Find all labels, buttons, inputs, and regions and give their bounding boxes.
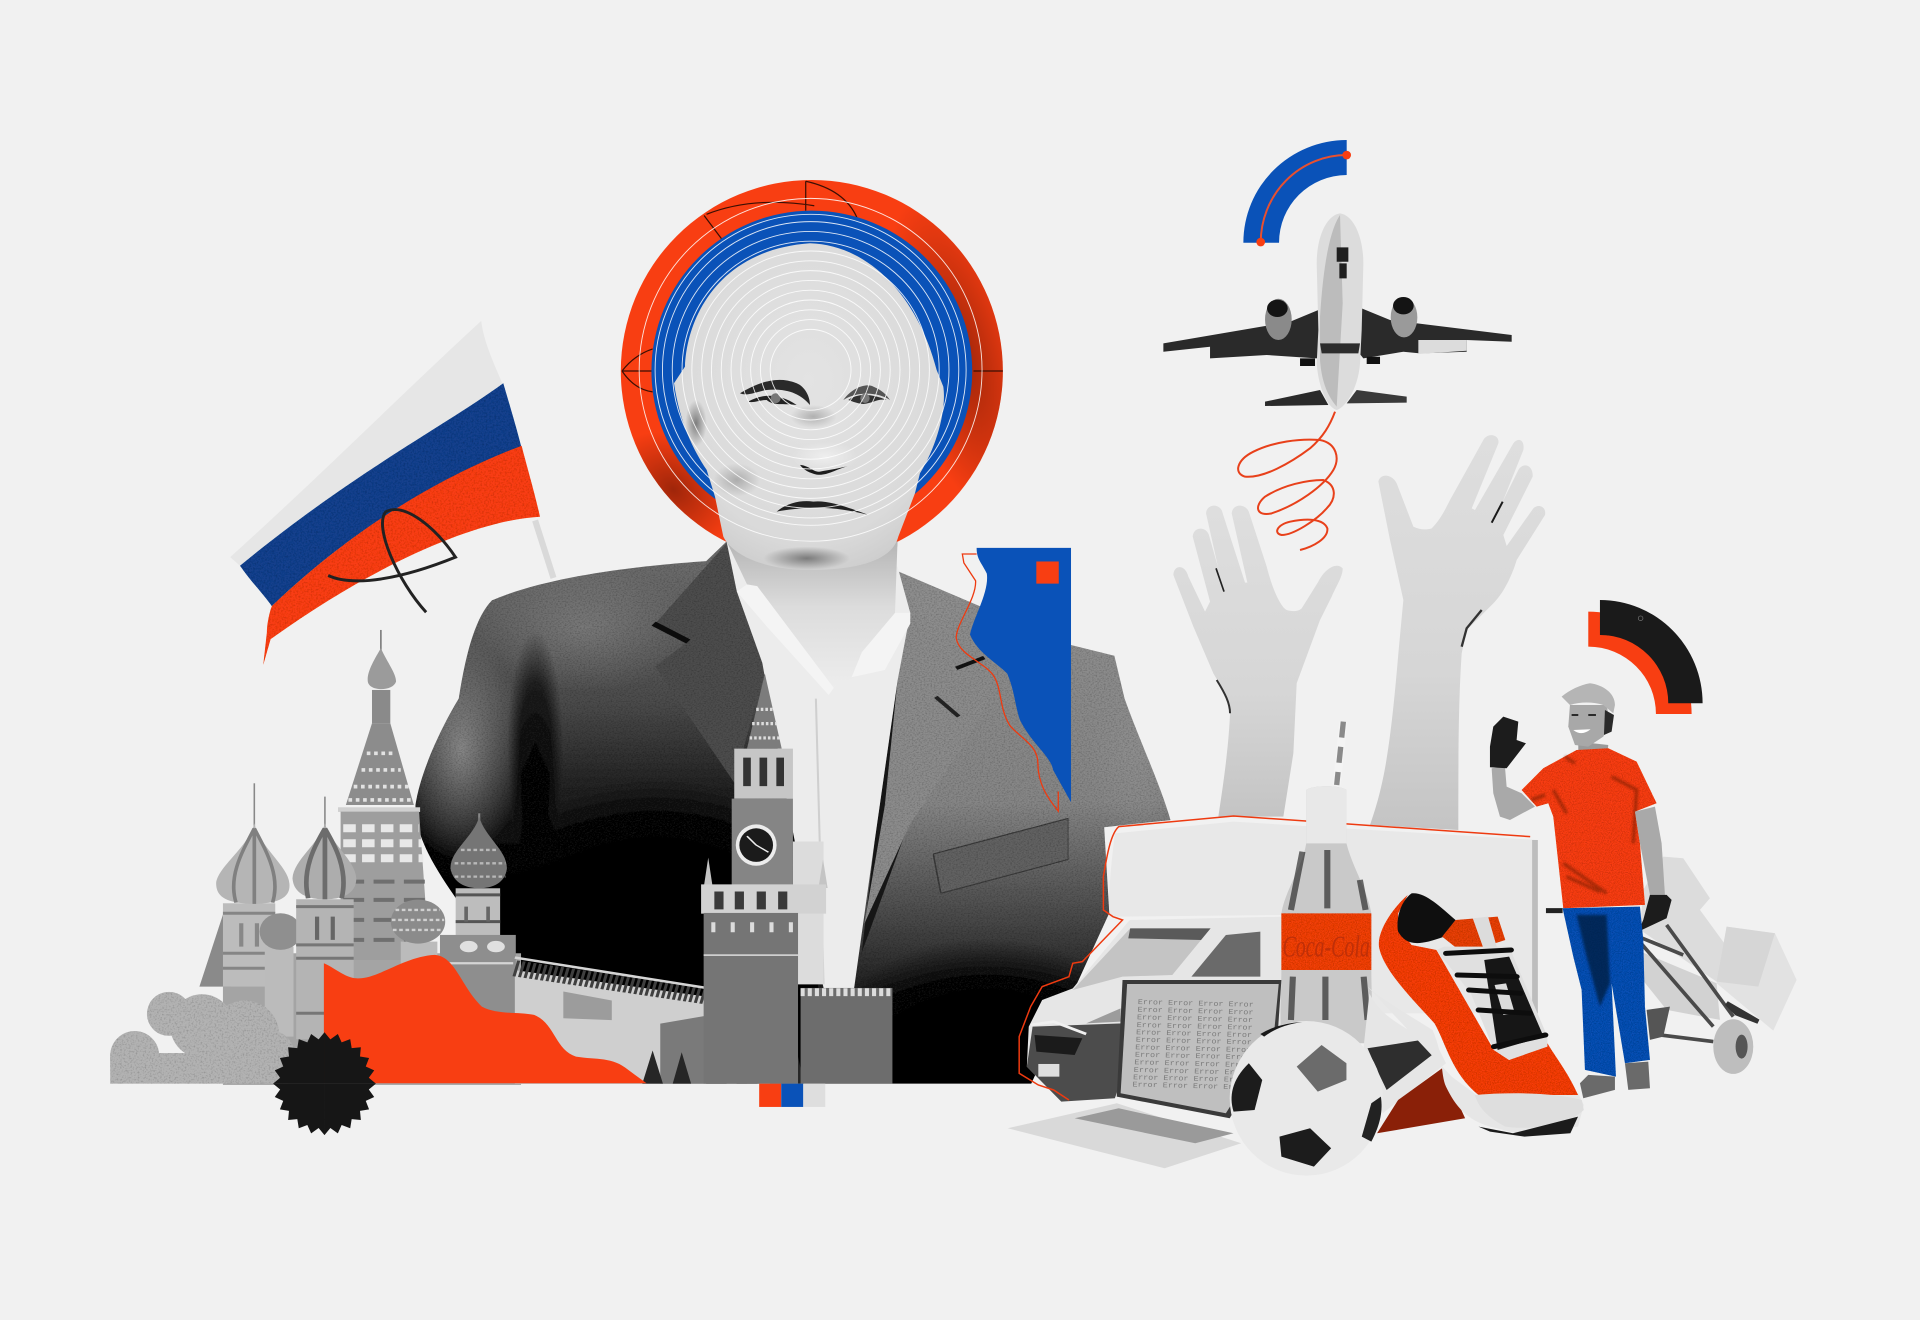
left ear shadow (685, 400, 707, 447)
Kremlin wall (515, 958, 806, 1092)
red torn paper shape (324, 955, 647, 1083)
glass soda bottle (1281, 786, 1372, 1043)
nose (800, 465, 848, 475)
front bumper and grille (1027, 1023, 1123, 1102)
St Basil's Cathedral (199, 630, 521, 1085)
black starburst seal (273, 1032, 376, 1135)
screen error text: Error Error Error Error (1137, 1021, 1253, 1033)
screen error text: Error Error Error Error (1137, 1006, 1254, 1017)
eyestay (1436, 947, 1547, 1060)
soccer ball (1230, 1021, 1383, 1176)
engines (1265, 299, 1292, 340)
head and face (674, 243, 944, 570)
eyes (748, 396, 797, 405)
screen error text: Error Error Error Error (1132, 1081, 1249, 1092)
raised arm (1492, 767, 1535, 820)
glove (1490, 717, 1526, 768)
left onion dome (253, 783, 256, 827)
delivery worker (1490, 683, 1672, 1098)
shirt folds (1532, 757, 1637, 893)
left lapel (655, 543, 765, 783)
side window (1191, 932, 1260, 977)
handle (1546, 903, 1563, 918)
finger crease (1492, 502, 1503, 523)
white sole band (1368, 987, 1584, 1133)
suit fabric shading (415, 542, 1170, 1084)
raised hand left (1173, 506, 1343, 817)
main tower (379, 630, 382, 657)
screen error text: Error Error Error Error (1135, 1044, 1252, 1055)
left cone (199, 907, 231, 987)
red upper (1379, 895, 1578, 1095)
shirt (1522, 748, 1657, 908)
red spiral scribble (1238, 412, 1337, 550)
cap (1562, 683, 1615, 713)
neck (727, 542, 898, 644)
brick body (704, 913, 798, 1092)
blue and red arc above plane (1243, 140, 1351, 246)
hand truck with boxes (1637, 857, 1797, 1074)
shoes (1580, 1075, 1615, 1098)
base mass (223, 953, 521, 1085)
wings (1163, 310, 1323, 358)
pentagons (1297, 1045, 1346, 1092)
black collar (1397, 893, 1456, 943)
lowered arm (1635, 807, 1665, 895)
screen error text: Error Error Error Error (1136, 1029, 1252, 1040)
jeans (1563, 907, 1650, 1077)
finger crease (1216, 568, 1224, 592)
Spasskaya clock tower (701, 674, 892, 1092)
label lettering: Coca-Cola (1283, 931, 1370, 964)
second sneaker behind (1364, 993, 1465, 1133)
laptop showing error text (1008, 980, 1281, 1168)
lattice dome (401, 942, 437, 965)
red label (1281, 913, 1371, 970)
concentric white lines over face and halo (639, 198, 982, 541)
red sneaker (1368, 893, 1584, 1137)
wheel (1713, 1019, 1753, 1074)
red outline (1019, 816, 1530, 1100)
wrist shadow (1217, 680, 1230, 713)
tongue (1442, 917, 1505, 953)
laces (1484, 957, 1544, 1050)
wheels (1300, 357, 1380, 366)
brows (740, 380, 810, 405)
screen error text: Error Error Error Error (1138, 998, 1254, 1010)
screen error text: Error Error Error Error (1134, 1066, 1250, 1078)
lapel buttonhole (936, 697, 959, 716)
shirt collar (736, 584, 910, 682)
left tower (223, 903, 275, 987)
shirt front (727, 541, 910, 988)
windshield (1073, 928, 1211, 990)
airplane (1163, 213, 1512, 410)
man's suit jacket, shirt and neck (415, 542, 1170, 1084)
wrist shadow (1462, 610, 1482, 647)
heel piece (1475, 1093, 1584, 1128)
screen error text: Error Error Error Error (1134, 1059, 1251, 1070)
shadow beside shirt (862, 682, 904, 952)
second tower (296, 899, 354, 1039)
small left dome (265, 947, 294, 1037)
clock face (736, 824, 777, 866)
right lapel (864, 681, 921, 923)
second onion dome (323, 797, 326, 827)
pocket (933, 818, 1068, 893)
tricolor swatch (759, 1084, 825, 1107)
screen error text: Error Error Error Error (1133, 1074, 1249, 1085)
pinnacles (704, 858, 828, 888)
right tower (456, 888, 500, 937)
raised hand right (1370, 435, 1545, 830)
blue paper shape with red square (956, 548, 1071, 811)
screen error text: Error Error Error Error (1137, 1014, 1253, 1025)
screen error text: Error Error Error Error (1135, 1051, 1251, 1062)
gripping hand (1638, 895, 1672, 932)
van with box body and red outline (1019, 816, 1538, 1107)
Russian flag (230, 321, 553, 665)
jaw and cheek shading (763, 547, 850, 570)
screen error text: Error Error Error Error (1136, 1036, 1252, 1047)
tread (1479, 1117, 1578, 1137)
mouth (777, 501, 868, 515)
right onion dome (450, 817, 507, 888)
halo: red and blue concentric disc (620, 180, 1003, 542)
striped straw (1337, 722, 1343, 785)
fuselage (1317, 213, 1363, 410)
tailplane (1265, 390, 1328, 406)
neck and head (1578, 742, 1608, 760)
trees (110, 992, 294, 1084)
arcs behind delivery worker (1588, 600, 1703, 714)
